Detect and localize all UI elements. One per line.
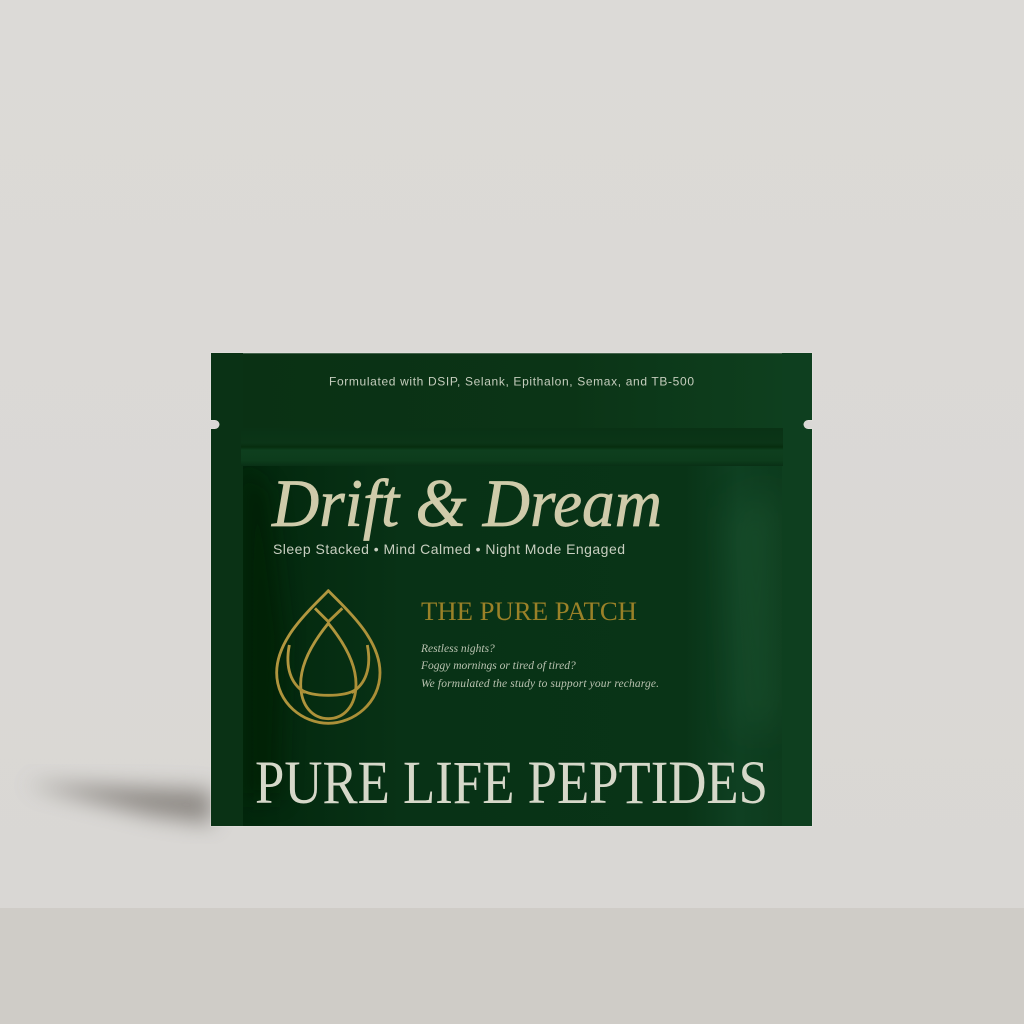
tagline: Sleep Stacked • Mind Calmed • Night Mode Engaged — [273, 541, 625, 557]
zip closure — [241, 428, 783, 466]
left side seal — [211, 353, 243, 826]
pouch — [211, 353, 812, 826]
subheading: THE PURE PATCH — [421, 597, 637, 626]
description: We formulated the study to support your recharge. — [421, 678, 659, 690]
top panel — [243, 354, 782, 430]
brand name: PURE LIFE PEPTIDES — [255, 750, 768, 817]
top line: Formulated with DSIP, Selank, Epithalon, Semax, and TB-500 — [329, 374, 694, 388]
right side seal — [782, 353, 812, 826]
floor strip — [0, 908, 1024, 1024]
pouch cast shadow — [25, 784, 212, 824]
right highlight — [744, 518, 770, 698]
title: Drift & Dream — [271, 465, 662, 541]
main panel — [243, 466, 782, 826]
description — [420, 643, 659, 690]
description: Restless nights? — [420, 643, 495, 655]
pouch body — [211, 353, 812, 826]
left dark crease — [274, 628, 275, 688]
icon: gold teardrop logo — [277, 591, 380, 723]
description: Foggy mornings or tired of tired? — [420, 660, 576, 672]
